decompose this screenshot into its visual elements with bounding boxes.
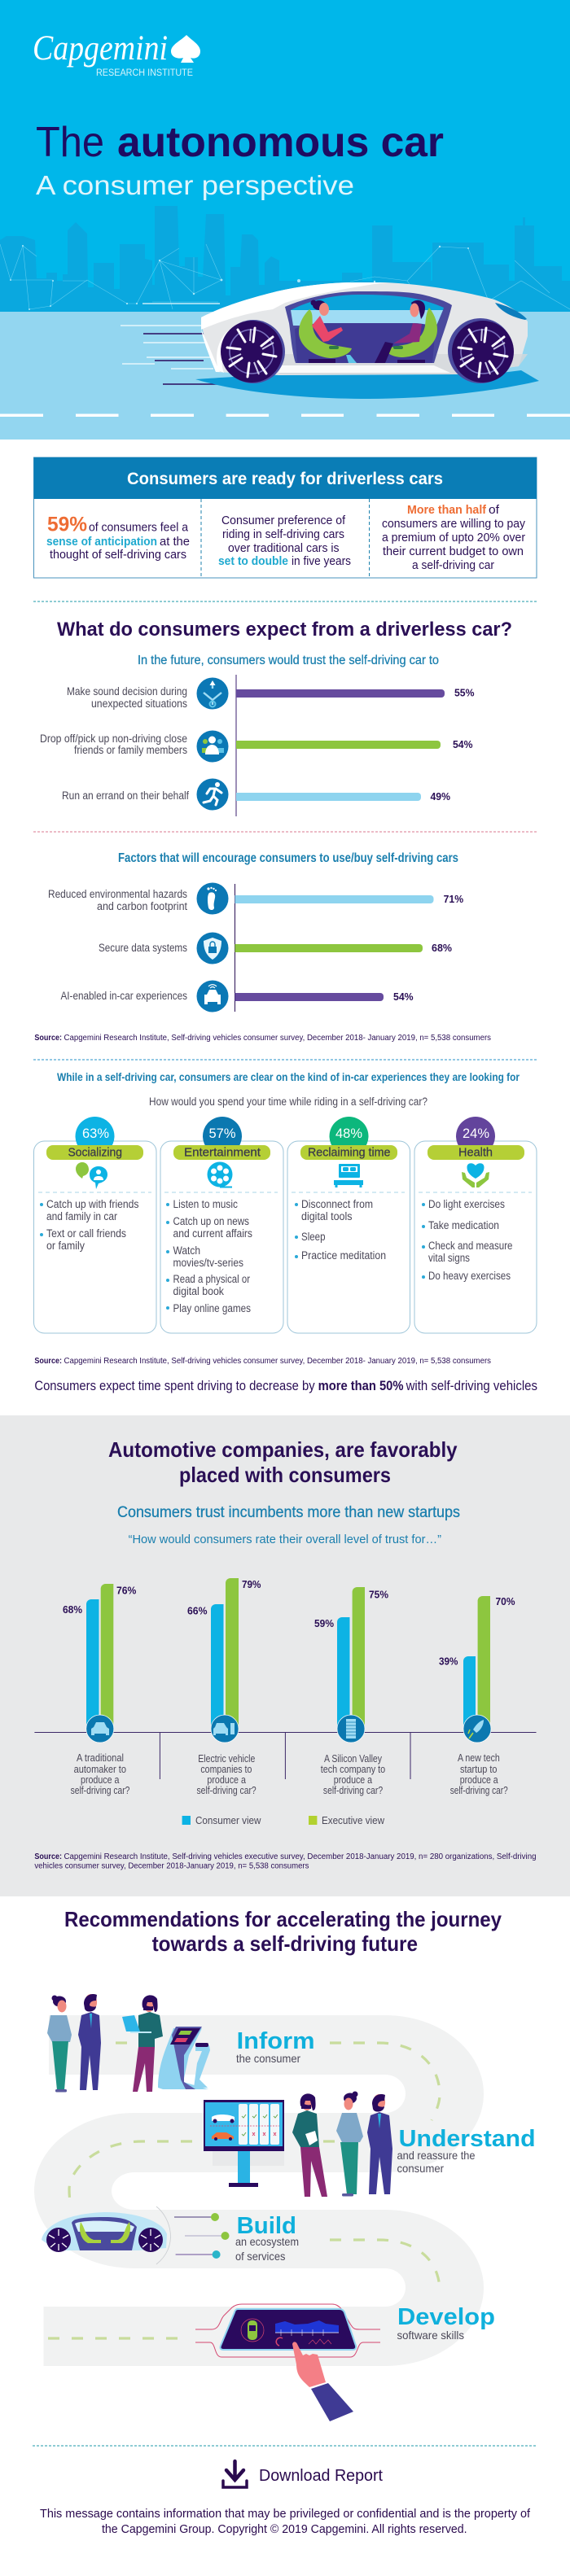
stat: 59% anticipation: 59% [47, 514, 87, 536]
stat: preference set to double: set to double [218, 555, 288, 568]
group: electric vehicle companies: 79% [242, 1578, 261, 1590]
icon: heart in hands [462, 1163, 489, 1187]
step: develop [195, 2304, 495, 2421]
group: new tech startup [439, 1595, 515, 1796]
icon: electric car [211, 1715, 239, 1743]
legend: Consumer view [195, 1814, 261, 1826]
card: entertainment [160, 1117, 283, 1333]
label: the consumer [236, 2052, 300, 2065]
source note 3: Source: [34, 1852, 62, 1861]
label [71, 1752, 129, 1796]
woman figure [47, 1996, 72, 2092]
row: secure data [99, 933, 452, 964]
label: of services [235, 2250, 285, 2263]
kiosk [158, 2027, 210, 2089]
group: electric vehicle companies: 66% [187, 1605, 208, 1616]
hero banner [0, 0, 570, 440]
list: Sleep [301, 1231, 326, 1243]
group: silicon valley [314, 1587, 388, 1796]
subtitle: A consumer perspective [36, 170, 354, 200]
stat: pay a premium: More than half [407, 504, 486, 517]
icon: connected car [197, 980, 228, 1012]
heading: placed with consumers [179, 1463, 391, 1487]
legend [182, 1814, 385, 1826]
card: socializing [34, 1117, 156, 1333]
category label [428, 1145, 524, 1160]
label: Develop [397, 2304, 495, 2330]
label: self-driving car? [450, 1785, 508, 1796]
headlight [495, 303, 527, 320]
label: A Silicon Valley [324, 1753, 383, 1765]
stat: pay a premium: a premium of upto 20% over [382, 531, 525, 545]
row: AI-enabled [60, 980, 414, 1012]
list: Catch up on news [173, 1215, 249, 1227]
stat: preference set to double: riding in self-driving cars [222, 528, 344, 541]
list: Do heavy exercises [428, 1270, 511, 1282]
subheading: Consumers trust incumbents more than new startups [117, 1504, 460, 1521]
row: run an errand: Run an errand on their behalf [62, 789, 189, 802]
label: A new tech [458, 1752, 500, 1764]
row: drop off [40, 731, 473, 762]
label: produce a [334, 1774, 372, 1786]
source note 2: Source: [34, 1357, 62, 1366]
list: Play online games [173, 1302, 251, 1314]
chart: factor bars [48, 882, 464, 1012]
row: sound decision: unexpected situations [91, 698, 187, 710]
icon: car [86, 1715, 114, 1743]
label: startup to [460, 1764, 498, 1775]
list: digital tools [301, 1210, 353, 1222]
row: secure data: 68% [432, 942, 452, 954]
label: produce a [460, 1774, 498, 1786]
list: Take medication [428, 1219, 499, 1231]
label: produce a [207, 1774, 246, 1786]
list: Listen to music [173, 1198, 238, 1210]
road [0, 312, 570, 440]
title: autonomous car [117, 119, 444, 166]
group: traditional automaker: 76% [116, 1584, 137, 1597]
statement: driving time: more than 50% [318, 1378, 404, 1393]
city skyline [0, 206, 570, 312]
icon: building [337, 1715, 365, 1743]
icon: runner [197, 778, 228, 811]
list: Disconnect from [301, 1198, 373, 1210]
label: self-driving car? [197, 1785, 256, 1796]
label: an ecosystem [235, 2235, 299, 2248]
label: software skills [397, 2329, 464, 2342]
row: sound decision [67, 677, 475, 710]
list: Text or call friends [46, 1227, 126, 1240]
heading: recommendations: towards a self-driving future [152, 1931, 418, 1956]
list [40, 1198, 139, 1252]
label: automaker to [74, 1764, 126, 1775]
icon: download [223, 2461, 247, 2487]
label: Inform [237, 2028, 315, 2054]
card: health [414, 1117, 537, 1333]
stat: pay a premium: their current budget to own [383, 545, 524, 558]
row: run an errand [62, 778, 450, 811]
category label [46, 1145, 143, 1160]
question text: How would you spend your time while riding in a self-driving car? [149, 1096, 428, 1108]
hand touching screen [292, 2342, 353, 2421]
icon: decision arrows [197, 677, 228, 710]
icon: family [197, 731, 228, 762]
label: Electric vehicle [198, 1753, 255, 1765]
label: self-driving car? [71, 1785, 129, 1796]
speed lines [121, 304, 230, 384]
label: and reassure the [397, 2149, 476, 2162]
row: drop off: friends or family members [74, 744, 187, 756]
card: reclaiming time [287, 1117, 410, 1333]
panel header [34, 457, 537, 499]
list: vital signs [428, 1252, 470, 1264]
source note 1: Source: [34, 1034, 62, 1043]
small car [42, 2212, 167, 2252]
stat: preference set to double: in five years [292, 555, 351, 568]
percentage: 57% [208, 1126, 236, 1141]
icon: rocket [463, 1715, 491, 1743]
icon: bed [334, 1164, 363, 1187]
statement: driving time [34, 1378, 537, 1393]
statement: driving time: with self-driving vehicles [406, 1378, 537, 1393]
front wheel [452, 321, 514, 383]
group: electric vehicle companies [187, 1578, 261, 1796]
lower sill [277, 354, 528, 374]
stat: 59% anticipation [46, 514, 190, 562]
subheading: trust: In the future, consumers would trust the self-driving car to [138, 654, 439, 667]
list: digital book [173, 1285, 224, 1297]
man with notes [292, 2093, 327, 2197]
step: build [42, 2206, 299, 2264]
label [450, 1752, 508, 1796]
row: environmental: and carbon footprint [97, 900, 187, 912]
row: environmental [48, 882, 464, 915]
label: tech company to [321, 1764, 385, 1775]
icon: film reel [207, 1162, 233, 1187]
row: secure data: Secure data systems [99, 942, 187, 954]
row: run an errand: 49% [430, 790, 450, 803]
panel: consumers are ready [34, 457, 537, 578]
car body [201, 282, 528, 375]
label: A traditional [77, 1752, 124, 1764]
suited man figure [78, 1994, 101, 2090]
stat: pay a premium: consumers are willing to pay [382, 518, 526, 531]
source note 3: Capgemini Research Institute, Self-driving vehicles executive survey, December 2018-January 2019, n= 280 organizations, Self-driving [64, 1852, 536, 1861]
row: drop off: 54% [453, 738, 473, 750]
list: movies/tv-series [173, 1257, 243, 1269]
man passenger [375, 300, 425, 363]
label [235, 2213, 299, 2263]
icon: footprint [197, 882, 228, 915]
panel header: Consumers are ready for driverless cars [127, 470, 443, 488]
list: Read a physical or [173, 1273, 250, 1285]
source note 3: vehicles consumer survey, December 2018-January 2019, n= 5,538 consumers [34, 1861, 309, 1870]
source note 3 [34, 1852, 536, 1870]
stat: preference set to double: over traditional cars is [228, 542, 339, 555]
stat: 59% anticipation: of consumers feel a [89, 522, 189, 535]
subheading: factors: Factors that will encourage consumers to use/buy self-driving cars [118, 851, 458, 865]
heading: what do consumers expect: What do consumers expect from a driverless car? [57, 619, 512, 641]
row: environmental: 71% [444, 893, 464, 905]
source note 2: Capgemini Research Institute, Self-driving vehicles consumer survey, December 2018- January 2019, n= 5,538 consumers [64, 1357, 491, 1366]
percentage: 24% [463, 1126, 489, 1141]
monitor comparison [204, 2100, 284, 2187]
list: and family in car [46, 1210, 117, 1222]
copyright note: the Capgemini Group. Copyright © 2019 Capgemini. All rights reserved. [102, 2522, 467, 2536]
list: Watch [173, 1244, 200, 1257]
row: AI-enabled: 54% [393, 991, 414, 1003]
icon: speech bubbles [76, 1162, 107, 1189]
list: or family [46, 1240, 85, 1252]
label [397, 2304, 495, 2342]
man with laptop [122, 1995, 163, 2092]
woman passenger [311, 300, 357, 363]
list: Practice meditation [301, 1249, 386, 1262]
category label: Reclaiming time [308, 1146, 391, 1159]
row: sound decision: 55% [454, 687, 475, 698]
label [321, 1753, 385, 1796]
stat: preference set to double: Consumer preference of [221, 514, 346, 527]
question: “How would consumers rate their overall level of trust for…” [129, 1533, 441, 1546]
window frame and cabin [285, 291, 452, 363]
list [166, 1198, 252, 1314]
label: Understand [399, 2126, 536, 2152]
autonomous car illustration [121, 282, 539, 399]
list: Do light exercises [428, 1198, 505, 1210]
stat: pay a premium [382, 504, 526, 572]
connector lines [156, 2206, 230, 2264]
row: drop off: Drop off/pick up non-driving close [40, 733, 187, 745]
left seat [299, 309, 352, 358]
list: Check and measure [428, 1240, 513, 1252]
category label: Entertainment [184, 1146, 261, 1159]
group: silicon valley: 75% [369, 1589, 388, 1600]
percentage: 48% [335, 1126, 362, 1141]
wheel arches [221, 320, 285, 383]
rear wheel [221, 321, 283, 383]
stat: 59% anticipation: sense of anticipation [46, 536, 157, 549]
logo: Capgemini Research Institute: Capgemini [33, 29, 168, 68]
woman figure [336, 2092, 363, 2196]
label: self-driving car? [323, 1785, 383, 1796]
stat: pay a premium: of [489, 504, 500, 517]
row: environmental: Reduced environmental hazards [48, 888, 187, 900]
sky background [0, 0, 570, 312]
label: consumer [397, 2162, 444, 2175]
label: produce a [81, 1774, 120, 1786]
heading [108, 1437, 458, 1487]
download report [223, 2461, 383, 2487]
icon: shield [197, 933, 228, 964]
label [397, 2126, 536, 2175]
car shadow [195, 370, 539, 399]
winding road [34, 2015, 484, 2366]
list: and current affairs [173, 1227, 252, 1240]
stat: 59% anticipation: at the [160, 536, 190, 549]
logo: Capgemini Research Institute: RESEARCH INSTITUTE [96, 68, 193, 78]
legend: Executive view [322, 1814, 385, 1826]
list: Catch up with friends [46, 1198, 139, 1210]
label [236, 2028, 315, 2065]
row: sound decision: Make sound decision during [67, 685, 187, 698]
stat: 59% anticipation: thought of self-driving cars [50, 549, 186, 562]
suited man figure [367, 2094, 392, 2194]
source note 1: Capgemini Research Institute, Self-driving vehicles consumer survey, December 2018- January 2019, n= 5,538 consumers [64, 1034, 491, 1043]
percentage: 63% [82, 1126, 109, 1141]
step: understand [204, 2092, 536, 2197]
stat: preference set to double [218, 514, 351, 568]
heading: recommendations [64, 1907, 502, 1956]
body highlight [201, 282, 385, 372]
stat: pay a premium: a self-driving car [412, 559, 494, 572]
skyline network lines [0, 244, 570, 309]
trust bar chart [34, 1578, 536, 1796]
copyright note [40, 2507, 531, 2536]
heading: recommendations: Recommendations for accelerating the journey [64, 1907, 502, 1931]
heading: Automotive companies, are favorably [108, 1437, 458, 1462]
road dashes [0, 413, 570, 417]
label: Build [237, 2213, 296, 2239]
list [295, 1198, 386, 1262]
category label: Socializing [68, 1146, 122, 1159]
group: new tech startup: 39% [439, 1655, 458, 1667]
label [197, 1753, 256, 1796]
group: traditional automaker [63, 1584, 137, 1796]
seat bases [309, 359, 425, 363]
step: inform [47, 1994, 315, 2092]
title: The [36, 119, 104, 166]
category label: Health [458, 1146, 493, 1159]
panel: automotive companies [0, 1415, 570, 1896]
dashboard display [195, 2304, 380, 2357]
right seat [385, 308, 437, 357]
skyline network nodes [10, 245, 469, 310]
copyright note: This message contains information that may be privileged or confidential and is the property of [40, 2507, 531, 2521]
list [422, 1198, 513, 1282]
group: silicon valley: 59% [314, 1617, 334, 1629]
chart: trust bars [40, 675, 475, 816]
download report: Download Report [259, 2467, 383, 2485]
group: traditional automaker: 68% [63, 1603, 82, 1616]
group: new tech startup: 70% [495, 1595, 515, 1607]
statement: driving time: Consumers expect time spent driving to decrease by [34, 1378, 315, 1393]
label: companies to [200, 1764, 252, 1775]
row: AI-enabled: AI-enabled in-car experiences [60, 990, 187, 1002]
